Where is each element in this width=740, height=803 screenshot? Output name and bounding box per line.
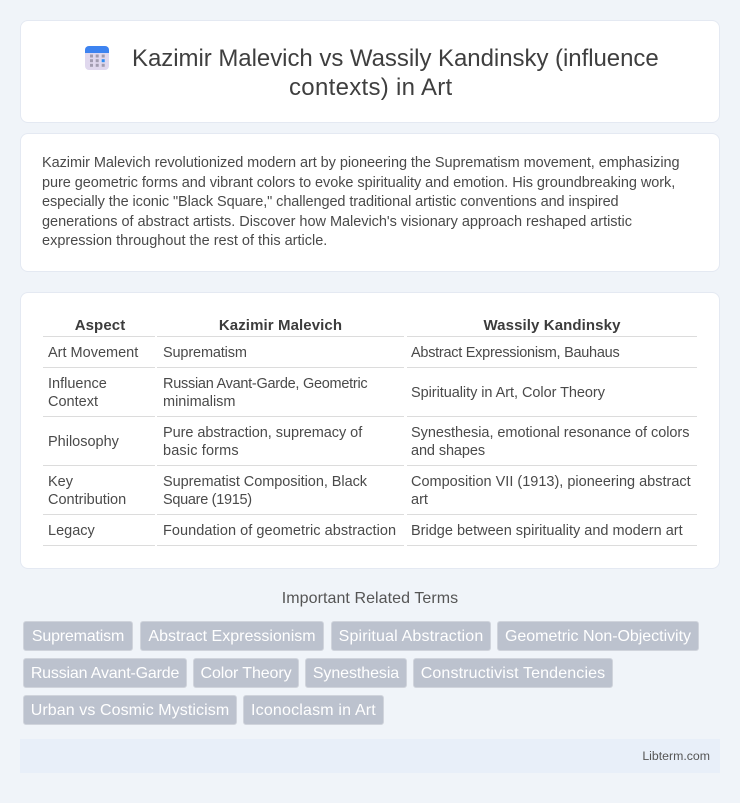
row: legacy: Foundation of geometric abstraction bbox=[163, 523, 396, 539]
related term tags: Abstract Expressionism bbox=[148, 628, 316, 645]
row: philosophy: and shapes bbox=[411, 443, 485, 459]
related term tags: Spiritual Abstraction bbox=[339, 628, 483, 645]
row: philosophy: basic forms bbox=[163, 443, 239, 459]
intro text: pure geometric forms and vibrant colors to evoke spirituality and emotion. His groundbreaking work, bbox=[42, 175, 675, 191]
row: legacy: Bridge between spirituality and modern art bbox=[411, 523, 683, 539]
row: legacy bbox=[48, 523, 683, 539]
row: art movement bbox=[48, 345, 620, 361]
title bbox=[132, 45, 659, 101]
footer credit: Libterm.com bbox=[642, 749, 710, 763]
row: key contribution: art bbox=[411, 492, 428, 508]
row: philosophy: Synesthesia, emotional resonance of colors bbox=[411, 425, 689, 441]
row: key contribution: Contribution bbox=[48, 492, 126, 508]
row: key contribution: Square (1915) bbox=[163, 492, 252, 508]
panel: title card bbox=[20, 20, 720, 123]
row: influence context bbox=[48, 376, 605, 410]
table header: Aspect bbox=[75, 317, 125, 334]
title: contexts) in Art bbox=[289, 74, 453, 101]
related term tags: Iconoclasm in Art bbox=[251, 702, 376, 719]
intro text: expression throughout the rest of this article. bbox=[42, 233, 327, 249]
row: philosophy: Philosophy bbox=[48, 434, 119, 450]
intro text: especially the iconic "Black Square," challenged traditional artistic conventions and inspired bbox=[42, 194, 619, 210]
related term tags: Russian Avant-Garde bbox=[31, 665, 179, 682]
related term tags: Constructivist Tendencies bbox=[421, 665, 605, 682]
related term tags: Urban vs Cosmic Mysticism bbox=[31, 702, 229, 719]
table header bbox=[75, 317, 621, 334]
row: influence context: minimalism bbox=[163, 394, 236, 410]
table header: Kazimir Malevich bbox=[219, 317, 342, 334]
row: key contribution: Key bbox=[48, 474, 73, 490]
row: influence context: Russian Avant-Garde, Geometric bbox=[163, 376, 367, 392]
panel: intro paragraph bbox=[20, 133, 720, 272]
heading: related terms: Important Related Terms bbox=[282, 590, 458, 607]
related term tags: Color Theory bbox=[200, 665, 292, 682]
row: art movement: Abstract Expressionism, Bauhaus bbox=[411, 345, 619, 361]
footer bbox=[20, 739, 720, 773]
icon: calendar bbox=[85, 46, 109, 70]
related term tags: Geometric Non-Objectivity bbox=[505, 628, 691, 645]
intro text: Kazimir Malevich revolutionized modern art by pioneering the Suprematism movement, emphasizing bbox=[42, 155, 680, 171]
title: Kazimir Malevich vs Wassily Kandinsky (influence bbox=[132, 45, 659, 72]
row: influence context: Context bbox=[48, 394, 98, 410]
row: art movement: Art Movement bbox=[48, 345, 138, 361]
row: key contribution: Composition VII (1913), pioneering abstract bbox=[411, 474, 691, 490]
row: influence context: Influence bbox=[48, 376, 107, 392]
related term tags: Synesthesia bbox=[313, 665, 399, 682]
related term tags: Suprematism bbox=[32, 628, 124, 645]
row: legacy: Legacy bbox=[48, 523, 95, 539]
row: art movement: Suprematism bbox=[163, 345, 247, 361]
row: philosophy: Pure abstraction, supremacy of bbox=[163, 425, 362, 441]
row: philosophy bbox=[48, 425, 689, 459]
row: key contribution bbox=[48, 474, 691, 508]
intro text: generations of abstract artists. Discover how Malevich's visionary approach reshaped artistic bbox=[42, 214, 632, 230]
intro text bbox=[42, 155, 680, 249]
row: key contribution: Suprematist Composition, Black bbox=[163, 474, 367, 490]
related term tags bbox=[23, 621, 699, 725]
panel: comparison table bbox=[20, 292, 720, 569]
row: influence context: Spirituality in Art, Color Theory bbox=[411, 385, 605, 401]
table header: Wassily Kandinsky bbox=[483, 317, 621, 334]
